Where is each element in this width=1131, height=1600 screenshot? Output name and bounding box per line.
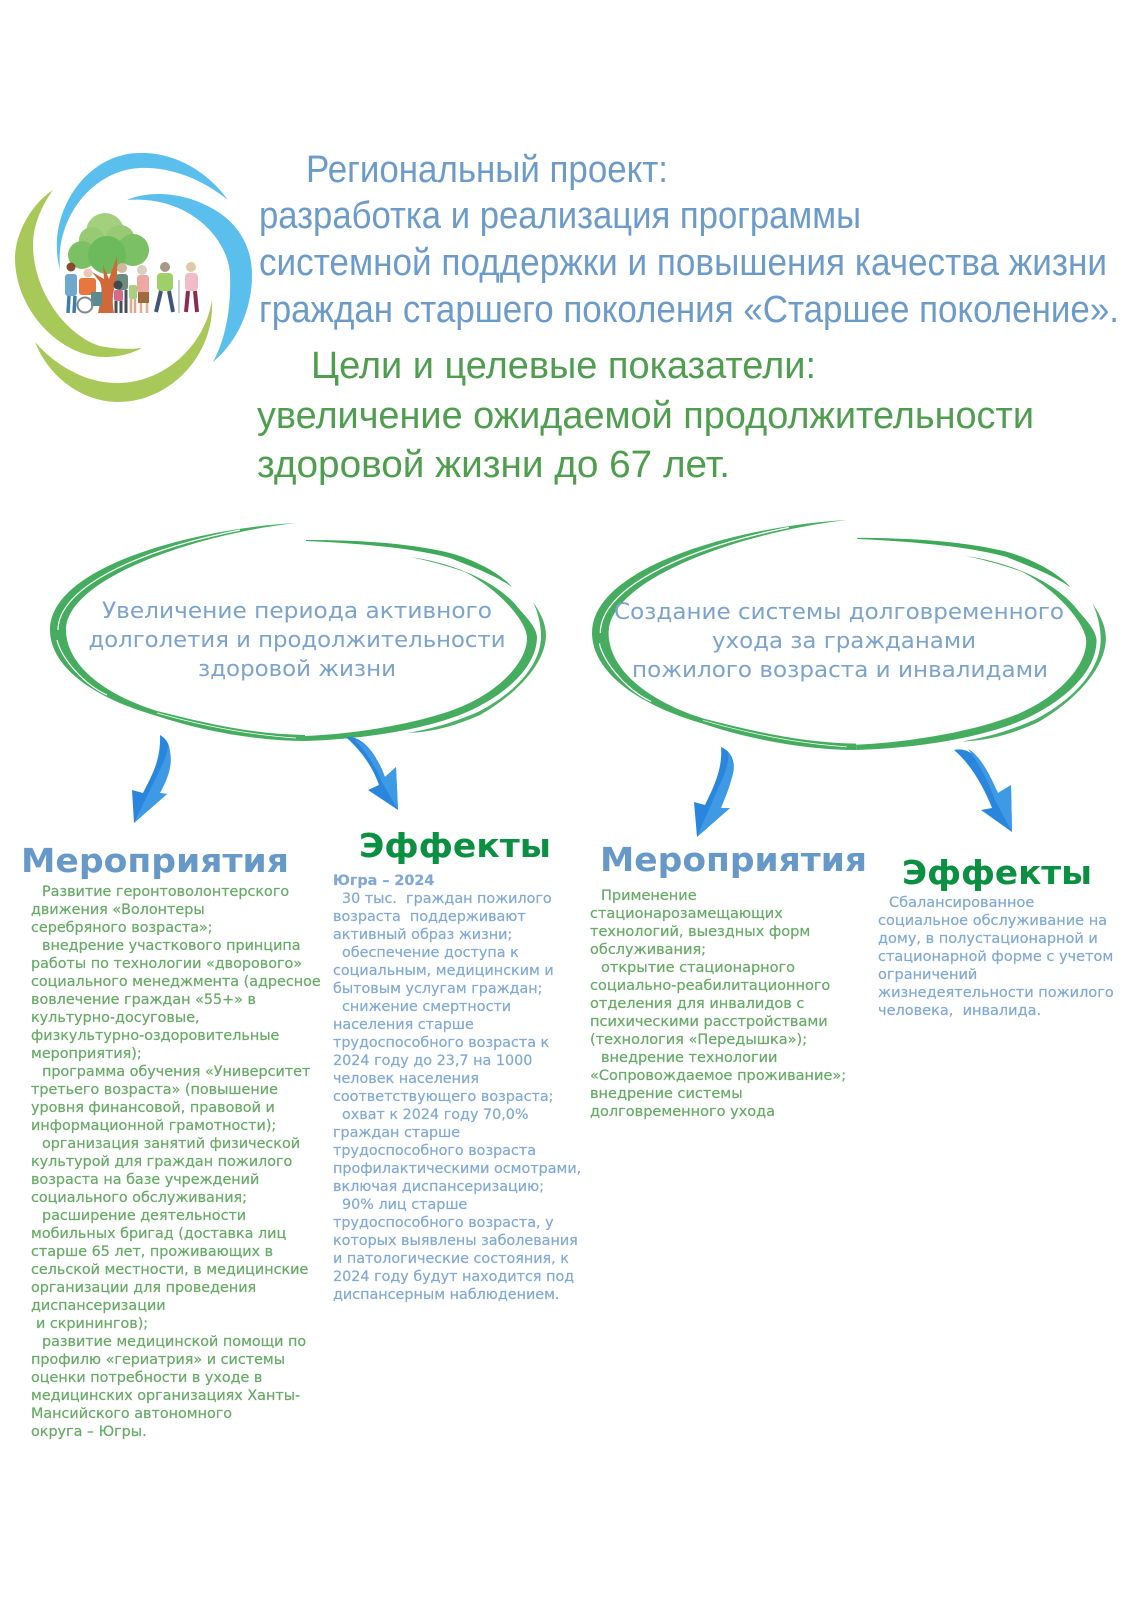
text block: activities right: стационарозамещающих [590, 906, 783, 922]
text block: effects left: социальным, медицинским и [333, 963, 554, 979]
text block: activities left: организация занятий физической [42, 1136, 300, 1152]
heading: effects right: Эффекты [902, 853, 1092, 892]
title: goals and targets: увеличение ожидаемой продолжительности [257, 395, 1034, 437]
text block: effects left: 90% лиц старше [342, 1197, 468, 1213]
text block: effects left [333, 873, 581, 1303]
arrow: to effects 2 [954, 749, 1012, 832]
text block: activities right: отделения для инвалидов с [590, 996, 804, 1012]
text block: effects left: 2024 году до 23,7 на 1000 [333, 1053, 532, 1069]
text block: activities right: Применение [601, 888, 697, 904]
text block: activities left: серебряного возраста»; [31, 920, 213, 936]
logo [15, 153, 252, 402]
text block: activities left: развитие медицинской помощи по [42, 1334, 306, 1350]
text block: effects left: трудоспособного возраста к [333, 1035, 550, 1051]
text block: effects left: бытовым услугам граждан; [333, 981, 542, 997]
text block: activities right: технологий, выездных форм [590, 924, 810, 940]
text block: effects left: Югра – 2024 [333, 873, 434, 889]
oval text [88, 599, 506, 682]
oval text: здоровой жизни [198, 657, 396, 682]
text block: effects right: Сбалансированное [889, 895, 1034, 911]
text block: activities right: открытие стационарного [601, 960, 795, 976]
oval text: долголетия и продолжительности [88, 628, 506, 653]
text block: activities left: и скринингов); [36, 1316, 148, 1332]
logo blue swirl top [57, 153, 228, 270]
oval text: пожилого возраста и инвалидами [632, 658, 1048, 683]
title: goals and targets: Цели и целевые показатели: [311, 345, 816, 387]
text block: effects right: ограничений [878, 967, 977, 983]
text block: activities left: Мансийского автономного [31, 1406, 232, 1422]
heading: activities left: Мероприятия [21, 841, 289, 880]
arrow: to activities 2 [694, 747, 734, 837]
text block: activities left: социального обслуживания; [31, 1190, 247, 1206]
text block: effects left: и патологические состояния, к [333, 1251, 569, 1267]
text block: activities left: организации для проведения [31, 1280, 256, 1296]
text block: activities left: округа – Югры. [31, 1424, 147, 1440]
text block: activities left: диспансеризации [31, 1298, 166, 1314]
logo green swirl left [15, 190, 142, 357]
title: regional project [259, 149, 1119, 331]
text block: activities left: культурно-досуговые, [31, 1010, 200, 1026]
text block: activities left: движения «Волонтеры [31, 902, 205, 918]
heading: effects left: Эффекты [359, 826, 551, 865]
text block: effects left: возраста поддерживают [333, 909, 526, 925]
title: goals and targets [257, 345, 1034, 486]
logo blue swirl right [127, 194, 252, 362]
text block: activities left: мобильных бригад (доставка лиц [31, 1226, 286, 1242]
text block: effects left: 2024 году будут находится под [333, 1269, 574, 1285]
text block: effects left: профилактическими осмотрами, [333, 1161, 581, 1177]
group of elderly people [65, 262, 198, 313]
text block: effects left: соответствующего возраста; [333, 1089, 554, 1105]
text block: activities left: Развитие геронтоволонтерского [42, 884, 289, 900]
text block: activities left: социального менеджмента (адресное [31, 974, 321, 990]
text block: effects right: стационарной форме с учетом [878, 949, 1113, 965]
text block: activities right: внедрение системы [590, 1086, 743, 1102]
text block: effects right: социальное обслуживание на [878, 913, 1107, 929]
oval: active longevity [50, 523, 546, 741]
oval: long-term care [592, 520, 1106, 750]
text block: activities left: программа обучения «Университет [42, 1064, 310, 1080]
text block: effects left: трудоспособного возраста, у [333, 1215, 554, 1231]
text block: effects right: человека, инвалида. [878, 1003, 1041, 1019]
text block: activities left: сельской местности, в медицинские [31, 1262, 308, 1278]
text block: activities left: информационной грамотности); [31, 1118, 276, 1134]
text block: effects left: населения старше [333, 1017, 474, 1033]
text block: activities left: медицинских организациях Ханты- [31, 1388, 300, 1404]
text block: activities right [590, 888, 846, 1120]
text block: activities right: «Сопровождаемое проживание»; [590, 1068, 846, 1084]
text block: effects left: охват к 2024 году 70,0% [342, 1107, 529, 1123]
text block: activities right: социально-реабилитационного [590, 978, 830, 994]
text block: activities right: (технология «Передышка»); [590, 1032, 807, 1048]
text block: activities left: расширение деятельности [42, 1208, 246, 1224]
heading: activities right: Мероприятия [600, 840, 867, 879]
oval text [614, 600, 1064, 683]
text block: activities right: обслуживания; [590, 942, 706, 958]
text block: effects left: граждан старше [333, 1125, 460, 1141]
text block: activities left: старше 65 лет, проживающих в [31, 1244, 273, 1260]
text block: effects left: диспансерным наблюдением. [333, 1287, 559, 1303]
title: goals and targets: здоровой жизни до 67 лет. [257, 444, 730, 486]
text block: activities left: физкультурно-оздоровительные [31, 1028, 280, 1044]
text block: activities left: культурой для граждан пожилого [31, 1154, 292, 1170]
text block: activities left: возраста на базе учреждений [31, 1172, 259, 1188]
text block: activities right: психическими расстройствами [590, 1014, 828, 1030]
text block: activities left: внедрение участкового принципа [42, 938, 301, 954]
text block: activities left: работы по технологии «дворового» [31, 956, 302, 972]
text block: effects left: включая диспансеризацию; [333, 1179, 544, 1195]
text block: effects right [878, 895, 1114, 1019]
title: regional project: Региональный проект: [306, 149, 668, 191]
text block: effects left: обеспечение доступа к [342, 945, 519, 961]
tree [68, 213, 149, 313]
text block: activities left: профилю «гериатрия» и системы [31, 1352, 285, 1368]
text block: effects right: дому, в полустационарной и [878, 931, 1098, 947]
text block: activities left: третьего возраста» (повышение [31, 1082, 278, 1098]
title: regional project: разработка и реализация программы [259, 195, 861, 237]
text block: effects left: которых выявлены заболевания [333, 1233, 578, 1249]
oval text: ухода за гражданами [712, 629, 976, 654]
text block: effects left: трудоспособного возраста [333, 1143, 536, 1159]
logo green swirl bottom [35, 300, 212, 402]
text block: effects right: жизнедеятельности пожилого [878, 985, 1114, 1001]
text block: activities left [31, 884, 321, 1440]
oval text: Создание системы долговременного [614, 600, 1064, 625]
arrow: to effects 1 [346, 737, 398, 810]
text block: activities left: оценки потребности в уходе в [31, 1370, 262, 1386]
text block: activities left: уровня финансовой, правовой и [31, 1100, 275, 1116]
text block: effects left: снижение смертности [342, 999, 511, 1015]
arrow: to activities 1 [132, 735, 171, 823]
text block: activities left: вовлечение граждан «55+» в [31, 992, 256, 1008]
text block: effects left: человек населения [333, 1071, 479, 1087]
text block: activities right: внедрение технологии [601, 1050, 777, 1066]
text block: activities left: мероприятия); [31, 1046, 142, 1062]
text block: effects left: 30 тыс. граждан пожилого [342, 891, 552, 907]
oval text: Увеличение периода активного [102, 599, 492, 624]
text block: effects left: активный образ жизни; [333, 927, 512, 943]
text block: activities right: долговременного ухода [590, 1104, 775, 1120]
